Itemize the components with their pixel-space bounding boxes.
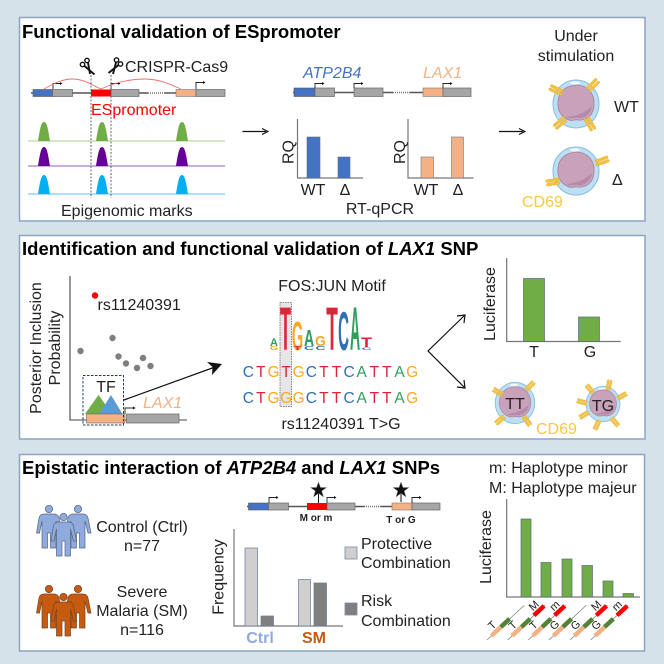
sequence logo: T xyxy=(293,346,303,351)
label: LAX1: LAX1 xyxy=(423,65,462,82)
bar chart: frequency: Ctrl xyxy=(246,630,274,647)
haplotype constructs: m xyxy=(610,599,625,614)
label: WT: WT xyxy=(614,99,639,116)
label: delta: Δ xyxy=(612,172,623,189)
legend: combinations: Risk xyxy=(361,593,392,610)
sequence logo: G xyxy=(315,334,326,350)
sequence logo: C xyxy=(304,346,315,351)
scatter plot: posterior inclusion probability: rs11240391 xyxy=(98,297,181,314)
label: control: Control (Ctrl) xyxy=(96,519,188,536)
bar chart: ATP2B4 RQ: WT xyxy=(301,182,326,199)
bar chart: LAX1 RQ: RQ xyxy=(392,140,409,164)
bar chart: luciferase T vs G xyxy=(482,258,621,361)
sequence logo: C xyxy=(315,346,326,351)
label: severe malaria: n=116 xyxy=(120,622,164,639)
haplotype constructs xyxy=(478,596,629,642)
bar chart: luciferase T vs G: Luciferase xyxy=(482,267,499,341)
icon: control group xyxy=(36,505,91,556)
bar chart: LAX1 RQ xyxy=(392,119,474,199)
sequence: T allele: G xyxy=(267,364,280,381)
icon: WT cell with CD69 xyxy=(548,78,600,132)
haplotype constructs: G xyxy=(548,618,562,633)
label: CD69: CD69 xyxy=(522,194,563,211)
panel: functional validation of ESpromoter xyxy=(20,18,645,221)
legend: combinations xyxy=(345,536,451,630)
haplotype constructs: T xyxy=(507,619,520,632)
arrows: branching xyxy=(428,315,465,388)
sequence: T allele: C xyxy=(306,364,317,381)
icon: severe malaria group xyxy=(36,585,91,636)
panel: epistatic interaction xyxy=(20,454,644,651)
label: ATP2B4: ATP2B4 xyxy=(302,65,362,82)
sequence: G allele: T xyxy=(370,390,380,407)
bar chart: ATP2B4 RQ: RQ xyxy=(280,140,298,164)
sequence: T allele: T xyxy=(319,364,329,381)
sequence logo: T xyxy=(326,295,338,364)
sequence logo: T xyxy=(280,294,291,364)
arrow xyxy=(242,128,268,134)
gene map with ESpromoter xyxy=(31,79,225,96)
sequence: G allele: A xyxy=(394,390,405,407)
TF binding diagram on LAX1: LAX1 xyxy=(143,395,182,412)
sequence logo: G xyxy=(270,345,279,351)
icon: TT cell xyxy=(492,380,536,427)
panel: LAX1 SNP identification xyxy=(20,236,645,439)
label: under stimulation: stimulation xyxy=(538,48,614,65)
bar chart: luciferase haplotypes xyxy=(478,499,640,597)
scatter plot: posterior inclusion probability xyxy=(28,276,187,420)
bar chart: frequency xyxy=(210,529,343,647)
gene map with variants: T or G xyxy=(386,515,416,526)
sequence: T allele: C xyxy=(243,364,254,381)
epigenomic tracks xyxy=(28,75,225,198)
label: under stimulation: Under xyxy=(554,28,598,45)
legend: combinations: Combination xyxy=(361,613,451,630)
sequence logo: C xyxy=(338,301,349,362)
gene map: ATP2B4 and LAX1 xyxy=(293,82,471,96)
bar chart: luciferase T vs G: G xyxy=(584,344,596,361)
sequence: G allele: G xyxy=(293,390,305,407)
sequence: G allele: G xyxy=(406,390,418,407)
label: severe malaria: Severe xyxy=(117,584,167,601)
sequence: G allele: T xyxy=(382,390,392,407)
sequence: T allele: A xyxy=(357,364,368,381)
label: epigenomic marks: Epigenomic marks xyxy=(61,203,193,220)
bar chart: luciferase haplotypes: Luciferase xyxy=(478,510,495,584)
label: rs11240391 T>G: rs11240391 T>G xyxy=(281,416,401,433)
highlight box: SNP position xyxy=(280,302,292,406)
label: haplotype key: M: Haplotype majeur xyxy=(489,480,637,497)
bar chart: frequency: SM xyxy=(302,630,326,647)
bar chart: LAX1 RQ: Δ xyxy=(453,182,464,199)
label: FOS:JUN Motif: FOS:JUN Motif xyxy=(278,278,386,295)
heading: panel 1: Functional validation of ESpromoter xyxy=(22,21,341,42)
icon: TG cell: TG xyxy=(592,398,614,415)
sequence: T allele: T xyxy=(256,364,266,381)
sequence logo: T xyxy=(361,335,372,350)
bar chart: LAX1 RQ: WT xyxy=(414,182,439,199)
sequence logo: A xyxy=(270,337,278,349)
haplotype constructs: T xyxy=(486,619,499,632)
icon: TG cell xyxy=(576,379,628,431)
sequence: T allele: G xyxy=(293,364,305,381)
label: ESpromoter: ESpromoter xyxy=(91,102,177,119)
sequence: G allele: G xyxy=(267,390,280,407)
bar chart: luciferase T vs G: T xyxy=(529,344,539,361)
bar chart: ATP2B4 RQ xyxy=(280,119,363,199)
legend: combinations: Protective xyxy=(361,536,432,553)
sequence: T allele: T xyxy=(370,364,380,381)
sequence: G allele: T xyxy=(319,390,329,407)
scatter plot: posterior inclusion probability: Probability xyxy=(47,311,64,385)
icon: TT cell: TT xyxy=(505,396,525,413)
heading: panel 3: Epistatic interaction of ATP2B4 and LAX1 SNPs xyxy=(22,457,440,478)
label: RT-qPCR: RT-qPCR xyxy=(346,201,414,218)
gene map with variants: M or m xyxy=(300,513,332,524)
label: severe malaria: Malaria (SM) xyxy=(96,603,188,620)
sequence: G allele: G xyxy=(280,390,292,407)
sequence logo: G xyxy=(292,313,303,359)
icon: delta cell with CD69 xyxy=(546,147,610,195)
label: control: n=77 xyxy=(124,538,160,555)
sequence: T allele: T xyxy=(332,364,342,381)
scatter plot: posterior inclusion probability: Posterior Inclusion xyxy=(28,282,45,414)
haplotype constructs: T xyxy=(527,619,541,632)
sequence logo: A xyxy=(350,296,360,364)
sequence: G allele: C xyxy=(343,390,355,407)
icon: right scissors xyxy=(108,58,123,74)
sequence: G allele: T xyxy=(256,390,266,407)
sequence logo xyxy=(270,294,372,364)
bar chart: ATP2B4 RQ: Δ xyxy=(340,182,351,199)
bar chart: frequency: Frequency xyxy=(210,539,228,615)
label: CRISPR-Cas9: CRISPR-Cas9 xyxy=(125,59,228,76)
haplotype constructs: M xyxy=(527,599,542,614)
sequence: G allele: C xyxy=(243,390,254,407)
haplotype constructs: G xyxy=(589,618,604,633)
haplotype constructs: G xyxy=(569,618,583,633)
label: CD69: CD69 xyxy=(536,421,577,438)
sequence logo: A xyxy=(304,327,314,352)
gene map with variants xyxy=(247,482,440,526)
sequence: T allele: T xyxy=(281,364,291,381)
sequence logo: C xyxy=(361,347,372,351)
sequence: G allele: C xyxy=(306,390,317,407)
sequence: G allele: T xyxy=(332,390,342,407)
arrow xyxy=(499,128,525,134)
sequence: T allele: G xyxy=(406,364,418,381)
icon: left scissors xyxy=(80,58,94,74)
sequence: T allele: A xyxy=(394,364,405,381)
sequence: T allele: T xyxy=(382,364,392,381)
TF binding diagram on LAX1 xyxy=(83,376,182,425)
label: haplotype key: m: Haplotype minor xyxy=(489,460,628,477)
sequence: G allele: A xyxy=(357,390,368,407)
heading: panel 2: Identification and functional validation of LAX1 SNP xyxy=(22,238,478,259)
sequence: T allele: C xyxy=(343,364,355,381)
TF binding diagram on LAX1: TF xyxy=(96,379,116,396)
legend: combinations: Combination xyxy=(361,555,451,572)
haplotype constructs: M xyxy=(589,599,604,614)
haplotype constructs: m xyxy=(548,599,562,614)
arrow: to motif xyxy=(124,362,222,400)
